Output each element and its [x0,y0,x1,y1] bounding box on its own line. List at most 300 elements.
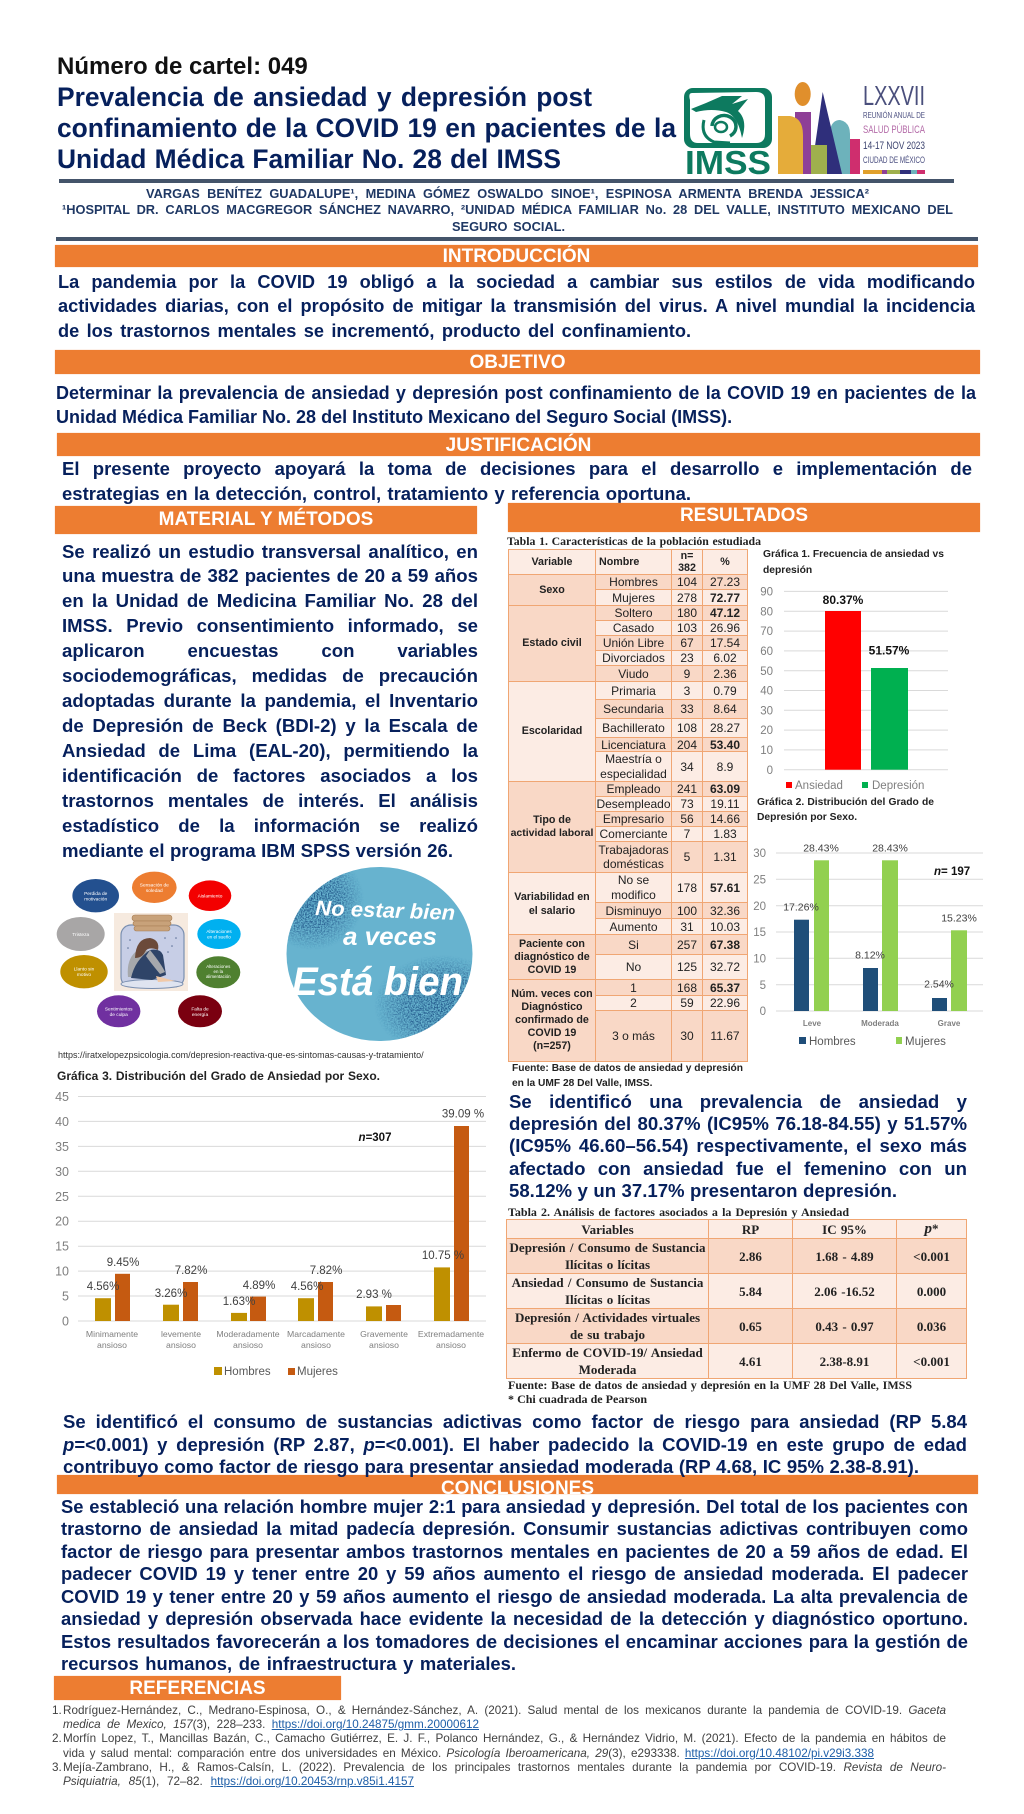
rows: número de veces con diagnóstico: COVID 19 [528,1027,576,1039]
symptom: tristeza [57,917,105,951]
rows: sexo: 72.77 [710,590,740,604]
text: material y métodos: trastornos mentales de interés. El análisis [62,790,478,811]
authors and affiliations: ¹HOSPITAL DR. CARLOS MACGREGOR SÁNCHEZ NAVARRO, ²UNIDAD MÉDICA FAMILIAR No. 28 DEL VALLE, INSTITUTO MEXICANO DEL [62,202,953,217]
authors and affiliations [62,186,953,234]
bars: hombres [95,1267,450,1321]
row: enfermo de covid / ansiedad moderada: Moderada [579,1362,636,1377]
row: depresión / actividades virtuales [506,1308,966,1344]
rows: variabilidad en el salario: No se [618,873,649,887]
table 1 source note: en la UMF 28 Del Valle, IMSS. [512,1078,652,1089]
rows: estado civil: 67 [680,636,694,650]
chart title: gráfica 3: Gráfica 3. Distribución del Grado de Ansiedad por Sexo. [57,1069,380,1083]
y axis labels: 0 [767,765,773,777]
heading: introducción: INTRODUCCIÓN [443,246,590,267]
category labels: Gravemente [360,1329,408,1339]
bars: mujeres [814,860,967,1011]
rows: estado civil: 17.54 [710,636,740,650]
rows: estado civil: 23 [680,651,694,665]
rows: escolaridad: 8.64 [713,702,737,716]
y axis labels: 10 [55,1265,69,1279]
text: conclusiones: Estos resultados favorecerán a los tomadores de decisiones el encaminar acciones para la gestión de [61,1631,968,1652]
text: 2. [52,1732,62,1745]
rows: paciente con diagnóstico de COVID 19: No [626,960,641,974]
rows: estado civil: Unión Libre [603,636,664,650]
category labels: Moderadamente [216,1329,280,1339]
authors and affiliations: VARGAS BENÍTEZ GUADALUPE¹, MEDINA GÓMEZ OSWALDO SINOE¹, ESPINOSA ARMENTA BRENDA JESSICA² [146,186,869,201]
reference list: Mejía-Zambrano, H., & Ramos-Calsín, L. (2022). Prevalencia de los principales trastornos mentales durante la pandemia por COVID-19. Revista de Neuro- [63,1761,946,1774]
rows: escolaridad: Licenciatura [601,738,666,752]
table header: n= [681,550,693,562]
rows: estado civil: Divorciados [602,651,665,665]
value labels: 39.09 % [442,1108,484,1120]
category labels: ansioso [301,1340,331,1350]
rows: escolaridad: especialidad [600,766,667,780]
value labels [87,1108,484,1308]
value labels: 28.43% [803,842,839,854]
symptom: tristeza: Tristeza [72,932,89,938]
legend: Depresión [872,780,924,792]
table header [509,550,747,574]
symptom: llanto sin motivo: motivo [77,972,91,978]
symptom: sensación de soledad [132,872,177,903]
rows: paciente con diagnóstico de COVID 19: Si [628,938,639,952]
value labels: 4.56% [87,1281,119,1293]
row: ansiedad / consumo: Ansiedad / Consumo de Sustancia [512,1275,703,1290]
rows: variabilidad en el salario: el salario [529,904,575,916]
category labels: ansioso [369,1340,399,1350]
legend: Mujeres [905,1036,946,1048]
rows: variabilidad en el salario: 100 [677,904,697,918]
symptom: llanto sin motivo [60,955,108,988]
rows: estado civil: Viudo [618,666,649,680]
text: objetivo: Determinar la prevalencia de ansiedad y depresión post confinamiento de la COVID 19 en pacientes de la [56,383,976,403]
rows: tipo de actividad laboral: domésticas [603,857,664,871]
table header: Variables [581,1222,634,1236]
symptom: alteraciones en el sueño: Alteraciones [206,929,232,934]
rows: estado civil: 47.12 [710,606,740,620]
text: justificación [62,458,972,504]
heading: material y métodos [55,506,477,534]
bar: ansiedad [825,611,861,770]
rows: número de veces con diagnóstico: 3 o más [612,1029,655,1043]
table header: Variable [532,556,572,568]
table 1 source note: Fuente: Base de datos de ansiedad y depresión [512,1063,743,1074]
category labels: Marcadamente [287,1329,345,1339]
legend [214,1366,338,1378]
text: resultados prevalencia: depresión del 80.37% (IC95% 76.18-84.55) y 51.57% [509,1113,967,1134]
value labels: 7.82% [310,1265,342,1277]
text: material y métodos: sociodemográficas, medidas de precaución [62,665,478,686]
reference list: Rodríguez-Hernández, C., Medrano-Espinosa, O., & Hernández-Sánchez, A. (2021). Salud mental de los mexicanos durante la pandemia de COVID-19. Gaceta [63,1704,946,1717]
poster number: Número de cartel: 049 [57,53,308,80]
category labels: Extremadamente [418,1329,484,1339]
rows: tipo de actividad laboral: Comerciante [599,827,668,841]
y axis labels: 25 [753,874,766,886]
text: introducción: de los trastornos mentales se incrementó, producto del confinamiento. [58,321,691,341]
heading: referencias [54,1676,341,1700]
text: introducción: actividades diarias, con el propósito de mitigar la transmisión del virus. A nivel mundial la incidencia [58,296,975,316]
rows: sexo: 104 [677,575,697,589]
heading: justificación: JUSTIFICACIÓN [446,435,591,456]
category labels: Leve [803,1019,822,1028]
text: introducción [58,272,976,341]
heading: objetivo [55,350,980,374]
text: material y métodos: Se realizó un estudio transversal analítico, en [62,540,478,562]
rows: escolaridad [509,682,747,781]
rows: tipo de actividad laboral [509,782,747,872]
rows: número de veces con diagnóstico: 168 [677,980,697,994]
y axis labels: 35 [55,1140,69,1154]
y axis labels: 50 [760,666,773,678]
heading: conclusiones [57,1475,978,1494]
logo: IMSS [684,88,772,176]
text: material y métodos: de Depresión de Beck (BDI-2) y la Escala de [62,715,478,736]
value labels: 8.12% [855,950,885,962]
text: resultados factores de riesgo: p=<0.001) y depresión (RP 2.87, p=<0.001). El haber padecido la COVID-19 en este grupo de edad [63,1434,967,1454]
rows: estado civil: Casado [613,621,654,635]
y axis labels: 40 [760,686,773,698]
row: depresión / consumo: 1.68 - 4.89 [815,1248,874,1264]
text: conclusiones: padecer COVID 19 y tener entre 20 y 59 años aumento el riesgo de ansiedad moderada. El padecer [61,1563,968,1584]
title: confinamiento de la COVID 19 en pacientes de la [57,112,676,142]
symptom: alteraciones en el sueño [197,919,241,949]
rows: paciente con diagnóstico de COVID 19: 67.38 [710,938,740,952]
rows: tipo de actividad laboral: 56 [680,812,694,826]
text: material y métodos: estadístico de la información se realizó [62,815,478,836]
category labels: Moderada [861,1019,899,1028]
reference list: vida y salud mental: comparación entre dos universidades en México. Psicología Iberoamericana, 29(3), e293338. https://doi.org/10.48102/pi.v29i3.338 [63,1747,874,1760]
reference list: medica de Mexico, 157(3), 228–233. https://doi.org/10.24875/gmm.20000612 [63,1718,479,1731]
value labels: 51.57% [869,644,910,658]
y axis labels: 30 [760,706,773,718]
chart: gráfica 3 grado de ansiedad por sexo [55,1090,486,1378]
reference list: Psiquiatria, 85(1), 72–82. https://doi.org/10.20453/rnp.v85i1.4157 [63,1775,414,1788]
value labels: 10.75 % [422,1250,464,1262]
icon: woman in a jar [114,913,188,991]
rows: tipo de actividad laboral: Desempleado [596,797,671,811]
rows: número de veces con diagnóstico: 30 [680,1029,694,1043]
rows: escolaridad: 34 [680,760,694,774]
rows: paciente con diagnóstico de COVID 19 [509,935,747,979]
sample size n=197: n= 197 [934,866,970,878]
rows: tipo de actividad laboral: 1.31 [713,850,737,864]
y axis labels [753,848,766,1018]
legend: Hombres [224,1366,271,1378]
rows: escolaridad: 0.79 [713,684,737,698]
rows: tipo de actividad laboral: 14.66 [710,812,740,826]
rows: número de veces con diagnóstico: 2 [630,996,637,1010]
row: depresión / actividades virtuales: 0.65 [739,1318,762,1334]
y axis labels [55,1090,69,1328]
chart title: gráfica 2: Depresión por Sexo. [757,812,857,823]
row: depresión / actividades virtuales: Depresión / Actividades virtuales [515,1310,700,1325]
rows: número de veces con diagnóstico: (n=257) [533,1040,571,1052]
bars: mujeres [115,1126,469,1321]
text: resultados prevalencia [509,1091,967,1201]
rows: variabilidad en el salario: 178 [677,880,697,894]
rows: escolaridad: 8.9 [717,760,733,774]
category labels: ansioso [436,1340,466,1350]
table 1: características de la población [508,549,748,1062]
y axis labels: 15 [55,1240,69,1254]
y axis labels: 20 [55,1215,69,1229]
row: enfermo de covid / ansiedad moderada [506,1344,966,1378]
text: resultados factores de riesgo [62,1411,967,1477]
table 2 source notes [508,1378,912,1406]
table header: IC 95% [822,1222,867,1236]
reference list: Morfín Lopez, T., Mancillas Bazán, C., Camacho Gutiérrez, E. J. F., Polanco Hernández, G., & Hernández Vidrio, M. (2021). Efecto de la pandemia en hábitos de [63,1732,946,1745]
value labels: 28.43% [872,842,908,854]
rows: tipo de actividad laboral: 1.83 [713,827,737,841]
chart: gráfica 1 frecuencia de ansiedad vs depresión [760,586,948,792]
symptom: aislamiento: Aislamiento [198,894,223,900]
text: conclusiones: trastorno de ansiedad la mitad padecía depresión. Consumir sustancias adictivas contribuyen como [61,1518,968,1539]
text: resultados factores de riesgo: contribuyo como factor de riesgo para presentar ansiedad moderada (RP 4.68, IC 95% 2.38-8.91). [63,1456,919,1477]
rows: tipo de actividad laboral: 5 [684,850,690,864]
row: depresión / consumo: Depresión / Consumo de Sustancia [510,1240,705,1255]
text: justificación: estrategias en la detección, control, tratamiento y referencia oportuna. [62,482,691,504]
rows: número de veces con diagnóstico: 59 [680,996,694,1010]
rows: tipo de actividad laboral: actividad laboral [511,827,593,839]
chart: gráfica 2 grado de depresión por sexo [753,842,983,1048]
chart title: gráfica 2 [757,797,934,823]
symptom: sentimientos de culpa: Sentimientos [105,1006,133,1012]
rows: variabilidad en el salario: Variabilidad en [514,890,590,902]
chart title: gráfica 2: Gráfica 2. Distribución del Grado de [757,797,934,808]
row: ansiedad / consumo: 2.06 -16.52 [814,1284,875,1298]
y axis labels: 5 [760,980,766,992]
y axis labels: 90 [760,586,773,598]
legend: Mujeres [297,1366,338,1378]
chart title: gráfica 1: depresión [763,564,812,576]
symptom: alteraciones en la alimentación [196,956,240,988]
rows: tipo de actividad laboral: 73 [680,797,694,811]
row: depresión / consumo [506,1238,966,1274]
row: enfermo de covid / ansiedad moderada: 4.61 [739,1354,762,1368]
symptom: pérdida de motivación [72,879,119,912]
rows: variabilidad en el salario: Aumento [609,920,658,934]
category labels: ansioso [97,1340,127,1350]
category labels [86,1329,484,1350]
table header: p* [924,1221,938,1237]
rows: variabilidad en el salario: modifico [611,888,656,902]
text: material y métodos: Ansiedad de Lima (EAL-20), permitiendo la [62,740,478,761]
title [57,82,676,174]
rows: estado civil: 6.02 [713,651,737,665]
rows: escolaridad: Primaria [611,684,656,698]
y axis labels: 20 [760,725,773,737]
rows: variabilidad en el salario: 10.03 [710,920,740,934]
authors and affiliations: SEGURO SOCIAL. [452,219,565,234]
text: resultados prevalencia: (IC95% 46.60–56.54) respectivamente, el sexo más [509,1135,967,1156]
category labels: Grave [938,1019,961,1028]
rows: número de veces con diagnóstico: confirmado de [515,1014,589,1026]
rows: tipo de actividad laboral: 241 [677,782,697,796]
rows: variabilidad en el salario: Disminuyo [605,904,662,918]
y axis labels: 10 [753,954,766,966]
value labels: 3.26% [155,1288,187,1300]
rows: número de veces con diagnóstico: 1 [630,980,637,994]
value labels: 15.23% [941,912,977,924]
y axis labels: 80 [760,606,773,618]
text: conclusiones: recursos humanos, de infraestructura y materiales. [61,1653,516,1674]
text: resultados factores de riesgo: Se identificó el consumo de sustancias adictivas como factor de riesgo para ansiedad (RP 5.84 [63,1411,967,1432]
rows: número de veces con diagnóstico [509,980,747,1061]
rows: tipo de actividad laboral: 19.11 [710,797,740,811]
legend [786,780,924,792]
row: depresión / actividades virtuales: 0.43 - 0.97 [815,1318,874,1334]
rows: escolaridad: 108 [677,721,697,735]
illustration: "No estar bien a veces está bien" circle: a veces [343,923,437,951]
rows: escolaridad: Bachillerato [602,721,665,735]
legend: Ansiedad [795,780,843,792]
symptom: alteraciones en la alimentación: en la [214,969,224,974]
illustration: depression symptoms around woman in jar [56,872,241,1028]
rows: tipo de actividad laboral: Trabajadoras [598,842,669,856]
rows: estado civil: 2.36 [713,666,737,680]
table header: RP [742,1222,759,1236]
row: depresión / actividades virtuales: 0.036 [917,1318,946,1334]
text: conclusiones: factor de riesgo para presentar ambos trastornos mentales en pacientes de 20 a 59 años de edad. El [61,1541,968,1562]
row: enfermo de covid / ansiedad moderada: <0.001 [913,1354,950,1368]
text: material y métodos: en la Unidad de Medicina Familiar No. 28 del [62,590,478,611]
rows: escolaridad: Secundaria [603,702,664,716]
title: Unidad Médica Familiar No. 28 del IMSS [57,144,561,174]
rows: número de veces con diagnóstico: 22.96 [710,996,740,1010]
image source url: https://iratxelopezpsicologia.com/depresion-reactiva-que-es-sintomas-causas-y-tratamiento/ [58,1050,424,1060]
rows: tipo de actividad laboral: 63.09 [710,782,740,796]
y axis labels: 5 [62,1290,69,1304]
heading: introducción [55,245,978,267]
rows: estado civil [509,606,747,681]
y axis labels: 40 [55,1115,69,1129]
rows: número de veces con diagnóstico: 11.67 [710,1029,740,1043]
chart title: gráfica 1: Gráfica 1. Frecuencia de ansiedad vs [763,549,944,560]
logo: LXXVII Reunión Anual de Salud Pública [778,80,925,174]
text: resultados prevalencia: 58.12% y un 37.17% presentaron depresión. [509,1180,897,1201]
rows: estado civil: Soltero [614,606,653,620]
category labels: Minimamente [86,1329,138,1339]
table 1 source note [512,1063,743,1089]
symptom: sensación de soledad: soledad [146,888,163,894]
table title 1: Tabla 1. Características de la población estudiada [507,534,761,548]
text: 3. [52,1761,62,1774]
y axis labels: 15 [753,927,766,939]
symptom: llanto sin motivo: Llanto sin [74,966,95,972]
rows: paciente con diagnóstico de COVID 19: Paciente con [519,938,585,950]
rows: paciente con diagnóstico de COVID 19: diagnóstico de [514,950,590,962]
rows: estado civil: Estado civil [522,637,582,649]
symptom: falta de energía: energía [192,1012,208,1018]
rows: tipo de actividad laboral: 7 [684,827,690,841]
row: ansiedad / consumo [506,1274,966,1308]
rows: paciente con diagnóstico de COVID 19: 125 [677,960,697,974]
symptom: pérdida de motivación: motivación [84,896,107,902]
y axis labels: 25 [55,1190,69,1204]
value labels: 9.45% [107,1257,139,1269]
y axis labels: 10 [760,745,773,757]
symptom: aislamiento [189,880,231,911]
rows: escolaridad: Escolaridad [522,725,582,737]
row: enfermo de covid / ansiedad moderada: 2.38-8.91 [820,1354,869,1368]
text: material y métodos: una muestra de 382 pacientes de 20 a 59 años [62,565,478,586]
text: introducción: La pandemia por la COVID 19 obligó a la sociedad a cambiar sus estilos de vida modificando [58,272,975,292]
rows: estado civil: 180 [677,606,697,620]
text: material y métodos: mediante el programa IBM SPSS versión 26. [62,840,453,861]
y axis labels: 45 [55,1090,69,1104]
symptom: sentimientos de culpa [97,995,140,1027]
rows: escolaridad: 53.40 [710,738,740,752]
rows: sexo: 278 [677,590,697,604]
rows: escolaridad: Maestría o [605,752,662,766]
table 2 source notes: * Chi cuadrada de Pearson [508,1392,647,1406]
illustration: "No estar bien a veces está bien" circle: Está bien [292,960,463,1004]
illustration: "No estar bien a veces está bien" circle: No estar bien [315,897,456,925]
row: depresión / consumo: Ilícitas o lícitas [565,1257,650,1272]
y axis labels: 20 [753,901,766,913]
heading: justificación [57,433,980,456]
row: depresión / consumo: <0.001 [913,1248,950,1264]
value labels: 4.56% [291,1281,323,1293]
heading: material y métodos: MATERIAL Y MÉTODOS [159,509,373,530]
rows: tipo de actividad laboral: Empresario [603,812,664,826]
symptom: pérdida de motivación: Perdida de [84,891,108,897]
table 2 source notes: Fuente: Base de datos de ansiedad y depresión en la UMF 28 Del Valle, IMSS [508,1378,912,1392]
rows: número de veces con diagnóstico: 65.37 [710,980,740,994]
value labels [823,593,910,658]
text: material y métodos: IMSS. Previo consentimiento informado, se [62,615,478,636]
text: objetivo [56,383,976,427]
reference list [52,1704,946,1788]
text: conclusiones: ansiedad y depresión observada hace evidente la necesidad de la detección y diagnóstico oportuno. [61,1608,968,1629]
symptom: sentimientos de culpa: de culpa [110,1012,128,1018]
rows: escolaridad: 28.27 [710,721,740,735]
chart title: gráfica 1 [763,549,944,576]
rows: tipo de actividad laboral: Tipo de [533,814,571,826]
symptom: falta de energía [178,995,222,1027]
symptom: falta de energía: Falta de [191,1006,209,1012]
row: ansiedad / consumo: 0.000 [917,1284,946,1298]
legend: Hombres [809,1036,856,1048]
heading: objetivo: OBJETIVO [469,352,566,373]
heading: resultados: RESULTADOS [680,505,808,526]
text: objetivo: Unidad Médica Familiar No. 28 del Instituto Mexicano del Seguro Social (IMSS). [56,407,732,427]
text: conclusiones [61,1496,968,1674]
value labels: 2.93 % [356,1289,392,1301]
value labels: 2.54% [924,978,954,990]
table header [507,1220,966,1378]
value labels: 7.82% [175,1265,207,1277]
symptom: alteraciones en el sueño: en el sueño [207,934,231,940]
illustration: "No estar bien a veces está bien" circle [286,867,472,1041]
y axis labels: 30 [55,1165,69,1179]
text: material y métodos: identificación de factores asociados a los [62,765,478,786]
rows: escolaridad: 204 [677,738,697,752]
category labels: ansioso [233,1340,263,1350]
row: depresión / consumo: 2.86 [739,1248,762,1264]
y axis labels: 30 [753,848,766,860]
rows: número de veces con diagnóstico: Diagnóstico [521,1001,583,1013]
sample size n=307: n=307 [359,1132,391,1144]
rows: variabilidad en el salario: 31 [680,920,694,934]
heading: referencias: REFERENCIAS [129,1678,266,1699]
symptom: sensación de soledad: Sensación de [140,882,169,888]
table 2: factores asociados [506,1219,967,1379]
text: resultados prevalencia: Se identificó una prevalencia de ansiedad y [509,1091,967,1112]
legend [799,1036,946,1048]
rows: número de veces con diagnóstico: Núm. veces con [511,988,593,1000]
value labels [783,842,977,990]
